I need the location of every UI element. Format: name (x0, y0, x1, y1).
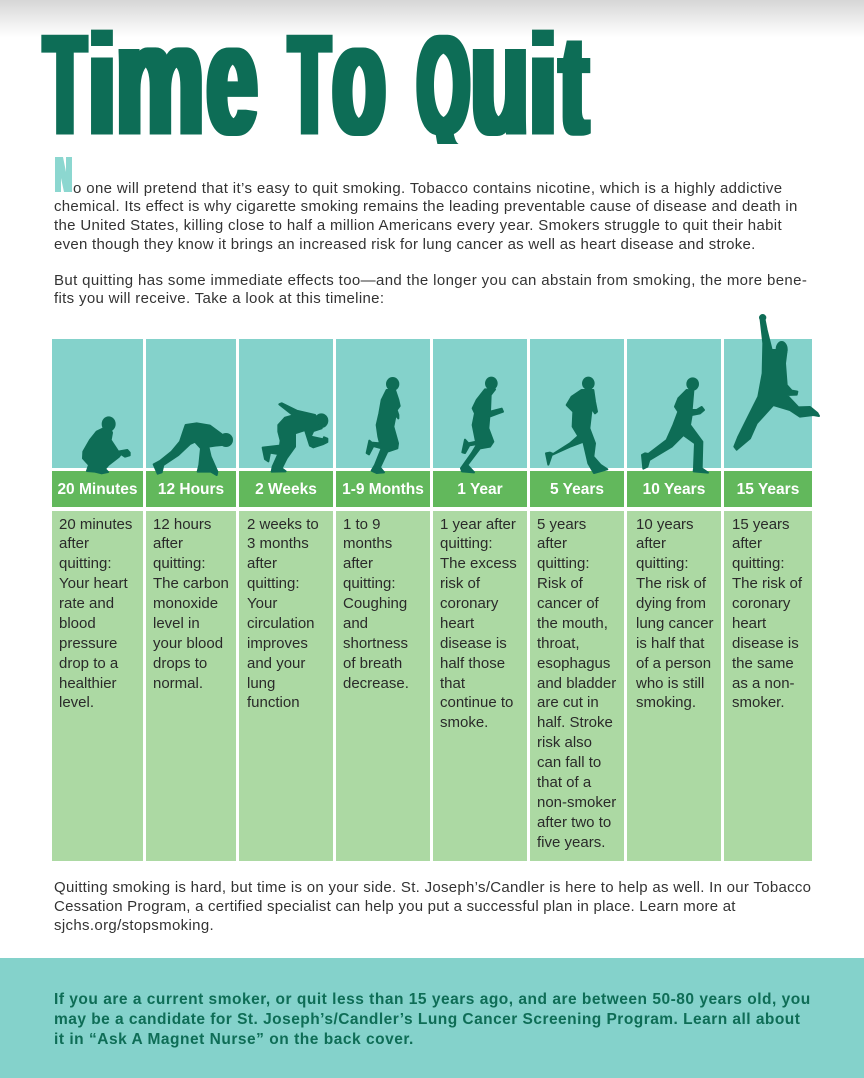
benefit descriptions: shortness (343, 635, 408, 652)
benefit descriptions: of breath (343, 655, 402, 672)
drop cap N (55, 157, 72, 192)
benefit descriptions: The excess (440, 555, 517, 572)
time headers: 12 Hours (158, 481, 224, 498)
benefit descriptions: coronary (732, 595, 790, 612)
benefit descriptions: half. Stroke (537, 714, 613, 731)
benefit descriptions: five years. (537, 834, 605, 850)
column backgrounds (52, 339, 812, 468)
closing paragraph: Cessation Program, a certified specialist can help you put a successful plan in place. Learn more at (54, 898, 736, 915)
bottom callout band (0, 958, 864, 1078)
benefit descriptions: 12 hours (153, 516, 211, 532)
benefit descriptions: pressure (59, 635, 117, 652)
intro paragraph: chemical. Its effect is why cigarette smoking remains the leading preventable cause of disease and death in (54, 198, 798, 215)
benefit descriptions: after (732, 535, 762, 552)
benefit descriptions: the mouth, (537, 615, 608, 632)
benefit descriptions: after (636, 535, 666, 552)
silhouette: 10 years running (642, 378, 708, 473)
benefit descriptions: drop to a (59, 655, 118, 672)
benefit descriptions: smoke. (440, 714, 488, 731)
benefit descriptions: 1 year after (440, 516, 516, 532)
benefit descriptions: healthier (59, 674, 117, 692)
silhouette: 1 year running (461, 378, 503, 472)
time headers (52, 471, 812, 507)
benefit descriptions: quitting: (247, 575, 300, 592)
benefit descriptions: Your heart (59, 575, 128, 592)
benefit descriptions: quitting: (343, 575, 396, 592)
benefit descriptions: after (537, 535, 567, 552)
benefit descriptions: non-smoker (537, 794, 616, 811)
runner silhouettes (82, 314, 820, 476)
benefit descriptions: lung (247, 674, 275, 692)
time headers: 1-9 Months (342, 481, 424, 498)
benefit descriptions: smoker. (732, 694, 785, 711)
benefit descriptions: 3 months (247, 535, 309, 552)
second paragraph: But quitting has some immediate effects too—and the longer you can abstain from smoking, the more bene- (54, 272, 807, 288)
time headers: 2 Weeks (255, 481, 317, 498)
benefit descriptions: throat, (537, 635, 580, 652)
callout text: If you are a current smoker, or quit less than 15 years ago, and are between 50-80 years old, you (54, 991, 811, 1008)
intro paragraph (54, 180, 798, 253)
benefit descriptions: your blood (153, 635, 223, 652)
intro paragraph: even though they know it brings an increased risk for lung cancer as well as heart disease and stroke. (54, 236, 756, 253)
benefit descriptions: smoking. (636, 694, 696, 711)
benefit descriptions: quitting: (440, 535, 493, 552)
callout text: may be a candidate for St. Joseph’s/Candler’s Lung Cancer Screening Program. Learn all about (54, 1011, 800, 1028)
closing paragraph (54, 879, 811, 934)
benefit descriptions: and (343, 615, 368, 632)
benefit descriptions: improves (247, 635, 308, 652)
silhouette: 12 hours sprint start (154, 423, 232, 475)
benefit descriptions: continue to (440, 694, 513, 711)
benefit descriptions: that (440, 674, 465, 692)
closing paragraph: sjchs.org/stopsmoking. (54, 917, 214, 934)
benefit descriptions: 5 years (537, 516, 586, 532)
silhouette: 1-9 months jogging (367, 378, 400, 473)
intro paragraph: the United States, killing close to half a million Americans every year. Smokers struggle to quit their habit (54, 217, 782, 234)
benefit descriptions: dying from (636, 595, 706, 612)
time headers: 20 Minutes (57, 481, 138, 498)
benefit descriptions: half those (440, 655, 505, 672)
benefit descriptions: disease is (440, 635, 507, 652)
benefit descriptions: can fall to (537, 754, 601, 771)
benefit descriptions: normal. (153, 674, 203, 692)
benefit descriptions: that of a (537, 774, 591, 791)
benefit descriptions: Risk of (537, 575, 583, 592)
second paragraph: fits you will receive. Take a look at this timeline: (54, 290, 384, 307)
benefit descriptions: monoxide (153, 595, 218, 612)
benefit descriptions: Coughing (343, 595, 407, 612)
benefit descriptions: level in (153, 615, 200, 632)
benefit descriptions: quitting: (153, 555, 206, 572)
time headers: 15 Years (737, 481, 799, 498)
benefit descriptions: 1 to 9 (343, 516, 381, 532)
closing paragraph: Quitting smoking is hard, but time is on your side. St. Joseph’s/Candler is here to help as well. In our Tobacco (54, 879, 811, 896)
benefit descriptions: The risk of (636, 575, 706, 592)
benefit descriptions: and your (247, 655, 305, 672)
benefit descriptions: quitting: (636, 555, 689, 572)
benefit descriptions: heart (440, 615, 474, 632)
benefit descriptions: The carbon (153, 575, 229, 592)
benefit descriptions: rate and (59, 595, 114, 612)
callout text (54, 991, 811, 1048)
silhouette: 15 years leaping (734, 315, 819, 450)
benefit descriptions: drops to (153, 655, 207, 672)
benefit descriptions: function (247, 694, 300, 711)
benefit descriptions: level. (59, 694, 94, 711)
benefit descriptions: 2 weeks to (247, 516, 319, 532)
benefit descriptions: after (153, 535, 183, 552)
benefit descriptions: quitting: (537, 555, 590, 572)
benefit descriptions: are cut in (537, 694, 599, 711)
benefit descriptions: 10 years (636, 516, 694, 532)
benefit descriptions: 20 minutes (59, 516, 132, 532)
time headers: 5 Years (550, 481, 604, 498)
benefit descriptions: quitting: (732, 555, 785, 572)
silhouette: 5 years running (546, 378, 607, 473)
benefit descriptions (52, 511, 812, 861)
benefit descriptions: after (343, 555, 373, 572)
callout text: it in “Ask A Magnet Nurse” on the back cover. (54, 1031, 414, 1048)
benefit descriptions: the same (732, 655, 794, 672)
benefit descriptions: of a person (636, 655, 711, 672)
benefit descriptions: as a non- (732, 674, 795, 692)
benefit descriptions: circulation (247, 615, 315, 632)
benefit descriptions: decrease. (343, 674, 409, 692)
benefit descriptions: after two to (537, 814, 611, 831)
benefit descriptions: lung cancer (636, 615, 714, 632)
benefit descriptions: 15 years (732, 516, 790, 532)
benefit descriptions: coronary (440, 595, 498, 612)
benefit descriptions: blood (59, 615, 96, 632)
benefit descriptions: esophagus (537, 655, 610, 672)
second paragraph (54, 272, 807, 307)
time headers: 1 Year (457, 481, 503, 498)
benefit descriptions: risk also (537, 734, 592, 751)
silhouette: 20 minutes crouching (83, 417, 130, 473)
benefit descriptions: who is still (636, 674, 704, 692)
benefit descriptions: Your (247, 595, 277, 612)
benefit descriptions: risk of (440, 575, 480, 592)
benefit descriptions: heart (732, 615, 766, 632)
benefit descriptions: after (59, 535, 89, 552)
benefit descriptions: months (343, 535, 392, 552)
benefit descriptions: is half that (636, 635, 704, 652)
benefit descriptions: disease is (732, 635, 799, 652)
benefit descriptions: quitting: (59, 555, 112, 572)
silhouette: 2 weeks rising (263, 403, 327, 472)
benefit descriptions: after (247, 555, 277, 572)
time headers: 10 Years (643, 481, 705, 498)
top shadow gradient (0, 0, 864, 38)
benefit descriptions: cancer of (537, 595, 599, 612)
intro paragraph: o one will pretend that it’s easy to quit smoking. Tobacco contains nicotine, which is a highly addictive (73, 180, 783, 196)
benefit descriptions: The risk of (732, 575, 802, 592)
benefit descriptions: and bladder (537, 674, 616, 692)
title (41, 0, 591, 144)
